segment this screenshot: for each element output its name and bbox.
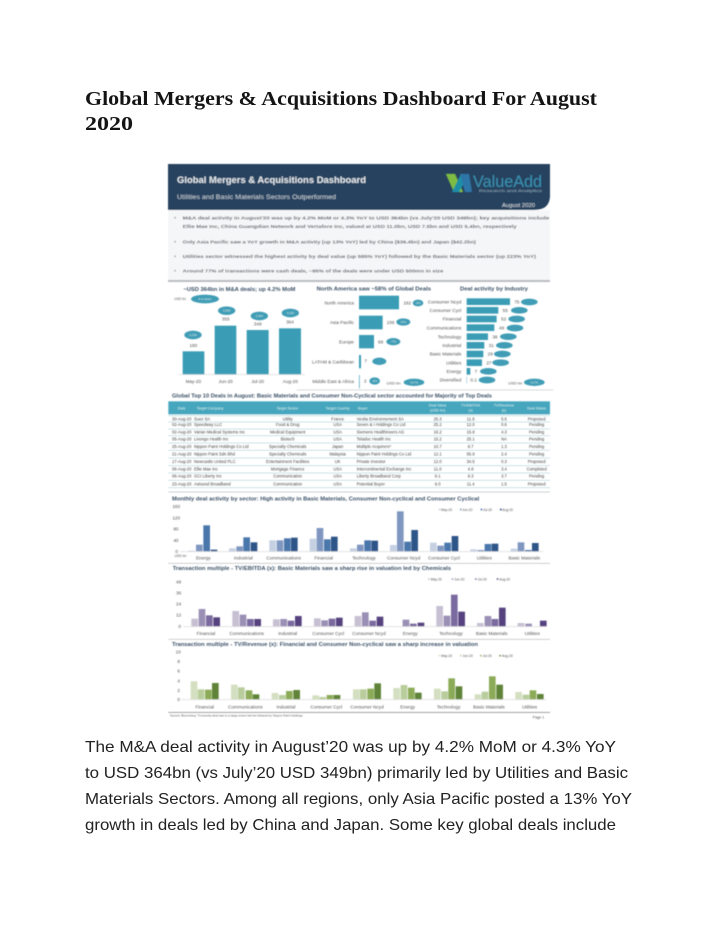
category labels: Communications [266, 556, 302, 561]
table rows: 11.9 [467, 416, 475, 421]
panel: TV/EBITDA multiple [168, 566, 550, 640]
dashboard image [168, 164, 553, 720]
panel: TV/EBITDA multiple: Transaction multiple - TV/EBITDA (x): Basic Materials saw a sharp rise in valuation led by Chemicals [173, 566, 451, 572]
table header: Date [178, 406, 186, 410]
table rows: Nippon Paint Holdings Co Ltd [194, 444, 249, 449]
table header: Target Sector [276, 406, 299, 410]
category labels: Energy [400, 704, 416, 709]
table rows: 25.2 [434, 422, 442, 427]
legend: Jul-20 [483, 654, 492, 658]
table rows: GCI Liberty Inc [194, 474, 222, 479]
table rows: 25-Aug-20 [172, 444, 192, 449]
region bar chart: USD bn [387, 381, 401, 386]
table rows: 3.7 [501, 474, 508, 479]
chart axis: 80 [173, 527, 179, 532]
category labels: Utilities [522, 704, 538, 709]
chart axis: 4 [177, 678, 180, 683]
table rows: Mortgage Finance [271, 467, 305, 472]
category labels: Consumer Cycl [312, 631, 344, 636]
table rows: UK [335, 459, 341, 464]
region bar chart: 106 [387, 320, 395, 325]
bar chart [182, 676, 547, 700]
industry bar chart: 55 [503, 308, 508, 313]
industry bar chart: 7 [475, 369, 478, 374]
category labels: Utilities [477, 556, 492, 561]
region bar chart: Europe [339, 340, 354, 345]
chart axis: 40 [173, 538, 179, 543]
table rows: Seven & I Holdings Co Ltd [357, 422, 406, 427]
bar chart: 2,964 [256, 314, 263, 318]
panel: deals by region: North America saw ~58% of Global Deals [317, 286, 431, 292]
table rows: 1.3 [501, 444, 508, 449]
dashboard header banner: Utilities and Basic Materials Sectors Outperformed [177, 194, 336, 201]
region bar chart: YoY% [410, 380, 418, 384]
table rows: Entertainment Facilities [266, 459, 309, 464]
legend: May-20 [441, 654, 452, 658]
dashboard header banner: Global Mergers & Acquisitions Dashboard [177, 175, 366, 186]
bar chart: 3,082 [223, 309, 231, 313]
table rows [168, 416, 550, 488]
table header: (x) [469, 409, 473, 413]
table header: Target Company [197, 406, 224, 410]
table rows: 05-Aug-20 [172, 436, 192, 441]
bar chart: 355 [222, 316, 230, 321]
table rows: 25.1 [467, 436, 475, 441]
table rows: 02-Aug-20 [172, 430, 192, 435]
table rows: France [331, 416, 345, 421]
table rows: Liberty Broadband Corp [357, 474, 401, 479]
industry bar chart [427, 298, 545, 386]
table rows: Specialty Chemicals [269, 451, 306, 456]
key takeaways bullets [168, 210, 550, 282]
category labels: Consumer Ncyd [387, 556, 421, 561]
industry bar chart: Consumer Cycl [429, 308, 461, 313]
table header: (x) [502, 409, 506, 413]
table rows: 15.2 [434, 436, 442, 441]
region bar chart: 182 [403, 300, 412, 305]
industry bar chart: 38 [492, 334, 498, 339]
title: 2020 [85, 113, 133, 135]
industry bar chart: 0.1 [470, 378, 477, 383]
table rows: Private Investor [357, 459, 386, 464]
industry bar chart: Industrial [442, 343, 461, 348]
table rows: Pending [529, 422, 545, 427]
category labels: Communications [229, 631, 265, 636]
region bar chart: LATAM & Caribbean [312, 359, 354, 364]
bar chart: 3,030 [287, 311, 294, 315]
table rows: 9.1 [435, 474, 441, 479]
table rows: 12.0 [467, 422, 475, 427]
page number: Page 1 [533, 716, 544, 720]
table rows: 16.2 [434, 430, 442, 435]
title: Global Mergers & Acquisitions Dashboard For August [85, 88, 597, 110]
panel: monthly deal value: USD bn [174, 297, 186, 301]
category labels [197, 631, 540, 636]
table rows: Pending [529, 474, 545, 479]
industry bar chart: Energy [447, 369, 462, 374]
table rows: Potential Buyer [357, 481, 385, 486]
table rows: Suez SA [194, 416, 210, 421]
region bar chart: Middle East & Africa [312, 379, 354, 384]
panel: deals by region: Deal activity by Industry [460, 286, 528, 292]
category labels [196, 556, 541, 561]
category labels: Communications [228, 704, 263, 709]
table rows: Intercontinental Exchange Inc [357, 467, 411, 472]
table rows: 8.0 [435, 481, 441, 486]
table rows: Malaysia [329, 451, 347, 456]
panel: deals by region [297, 286, 553, 390]
panel: top 10 deals table: Global Top 10 Deals in August: Basic Materials and Consumer Non-Cyclical sector accounted for Majority of Top Deals [172, 393, 492, 399]
table rows: 06-Aug-20 [172, 474, 192, 479]
chart axis: 0 [177, 697, 180, 702]
table header: TV/Revenue [494, 404, 514, 408]
chart axis: 8 [177, 659, 180, 664]
table rows: 06-Aug-20 [172, 467, 192, 472]
table rows: Japan [332, 444, 344, 449]
table rows: 17-Aug-20 [172, 459, 192, 464]
category labels: Energy [196, 556, 211, 561]
bar chart: 364 [286, 319, 294, 324]
chart axis: 10 [176, 649, 181, 654]
table rows: Newcastle United PLC [194, 459, 236, 464]
table header: Deal Status [527, 406, 546, 410]
chart axis: 2 [177, 688, 180, 693]
chart axis: 48 [176, 579, 182, 584]
table rows: Teladoc Health Inc [357, 436, 391, 441]
industry bar chart: Diversified [440, 378, 462, 383]
table rows: 2.4 [501, 451, 508, 456]
table rows: Varian Medical Systems Inc [194, 430, 245, 435]
table rows: 10.7 [434, 444, 442, 449]
body paragraph: growth in deals led by China and Japan. Some key global deals include [85, 817, 616, 834]
table rows: 21-Aug-20 [172, 451, 192, 456]
bar chart: 180 [189, 343, 198, 348]
table rows: 25.3 [434, 416, 442, 421]
category labels: Industrial [277, 704, 295, 709]
legend [428, 577, 510, 581]
table rows: 12.1 [434, 451, 442, 456]
table rows: Nippon Paint Holdings Co Ltd [357, 451, 412, 456]
table rows: 8.3 [468, 474, 474, 479]
panel: top 10 deals table [168, 393, 550, 492]
body paragraph [85, 739, 632, 834]
table rows: 02-Aug-20 [172, 422, 192, 427]
dashboard header banner [168, 164, 550, 210]
table rows: 4.3 [501, 430, 508, 435]
bar chart [178, 306, 305, 384]
key takeaways bullets: Around 77% of transactions were cash deals, ~95% of the deals were under USD 500mn in size [183, 268, 444, 274]
panel: TV/Revenue multiple: Transaction multiple - TV/Revenue (x): Financial and Consumer Non-cyclical saw a sharp increase in valuation [172, 642, 478, 648]
region bar chart: -7% [391, 340, 396, 344]
chart axis [172, 504, 186, 558]
table rows: Biotech [281, 436, 295, 441]
legend [439, 508, 513, 512]
category labels: Basic Materials [476, 631, 508, 636]
category labels: Industrial [234, 556, 253, 561]
category labels: Technology [439, 631, 463, 636]
bar chart: 349 [254, 321, 262, 326]
region bar chart: -6% [415, 301, 421, 305]
table rows: 23-Aug-20 [172, 481, 192, 486]
legend: Aug-20 [499, 577, 510, 581]
table rows: 15.8 [467, 430, 475, 435]
chart axis: 0 [175, 549, 178, 554]
table rows: Proposed [528, 416, 546, 421]
table rows: USA [333, 436, 342, 441]
table rows: Astound Broadband [194, 481, 231, 486]
logo: Research and Analytics [479, 188, 542, 193]
table rows: Communication [273, 474, 303, 479]
key takeaways bullets: Utilities sector witnessed the highest activity by deal value (up 585% YoY) followed by the Basic Materials sector (up 223% YoY) [183, 254, 536, 260]
industry bar chart: YoY% [530, 380, 539, 384]
chart axis: 36 [176, 591, 182, 596]
table rows: Proposed [528, 459, 546, 464]
body paragraph: to USD 364bn (vs July’20 USD 349bn) primarily led by Utilities and Basic [85, 765, 628, 782]
table rows: Speedway LLC [194, 422, 222, 427]
key takeaways bullets: Only Asia Pacific saw a YoY growth in M&A activity (up 13% YoY) led by China ($36.4bn) and Japan ($42.2bn) [183, 239, 476, 245]
panel: monthly deal value: # of deals [199, 297, 212, 301]
category labels: Consumer Cycl [428, 556, 460, 561]
table rows: Pending [529, 451, 545, 456]
table rows: Medical Equipment [270, 430, 306, 435]
table rows: Food & Drug [276, 422, 300, 427]
table rows: Communication [273, 481, 303, 486]
table rows: 4.8 [468, 467, 474, 472]
table header: (USD bn) [430, 409, 445, 413]
table rows: Siemens Healthineers AG [357, 430, 404, 435]
logo: ValueAdd [473, 172, 542, 191]
table rows: Completed [527, 467, 547, 472]
region bar chart: -8% [372, 379, 378, 383]
key takeaways bullets: M&A deal activity in August'20 was up by 4.2% MoM or 4.3% YoY to USD 364bn (vs July'20 USD 349bn); key acquisitions include [183, 215, 550, 221]
table rows: Proposed [528, 481, 546, 486]
bar chart [183, 595, 547, 627]
table rows: 55.9 [467, 451, 475, 456]
chart axis: 160 [172, 504, 181, 509]
chart axis [176, 649, 181, 702]
category labels: Consumer Cycl [310, 704, 342, 709]
body paragraph: Materials Sectors. Among all regions, only Asia Pacific posted a 13% YoY [85, 791, 632, 808]
category labels: Technology [437, 704, 461, 709]
title [85, 88, 597, 135]
legend [438, 654, 513, 658]
legend: Jun-20 [463, 654, 473, 658]
industry bar chart: Communications [427, 326, 462, 331]
table rows: USA [333, 430, 342, 435]
category labels: Financial [195, 704, 214, 709]
category labels: Energy [403, 631, 418, 636]
table rows: 12.0 [434, 459, 442, 464]
table rows: 8.7 [468, 444, 474, 449]
legend: Aug-20 [502, 654, 513, 658]
bar chart: Jul-20 [251, 379, 264, 384]
category labels: Consumer Ncyd [352, 631, 386, 636]
legend: Jul-20 [478, 577, 487, 581]
table rows: 0.6 [501, 422, 508, 427]
industry bar chart: Financial [443, 317, 461, 322]
source note: Source: Bloomberg; *Consortia deal was to a large extent bid led followed by Nippon Paint Holdings [170, 714, 303, 718]
table rows: 34.5 [467, 459, 475, 464]
table rows: USA [333, 467, 342, 472]
table rows: 3.4 [501, 467, 508, 472]
category labels: Financial [314, 556, 333, 561]
industry bar chart: 75 [514, 299, 520, 304]
category labels [195, 704, 538, 709]
legend: May-20 [431, 577, 442, 581]
panel: monthly deal activity by sector: Monthly deal activity by sector: High activity in Basic Materials, Consumer Non-cyclical and Consumer Cyclical [172, 497, 480, 503]
table rows: Pending [529, 444, 545, 449]
table rows: 5.6 [501, 416, 508, 421]
bar chart: May-20 [186, 379, 202, 384]
region bar chart: 2 [364, 379, 367, 384]
industry bar chart: 49 [499, 326, 505, 331]
industry bar chart: 31 [489, 343, 494, 348]
chart axis: 120 [172, 515, 181, 520]
legend: Jun-20 [454, 577, 465, 581]
table rows: USA [333, 474, 342, 479]
table rows: 11.4 [467, 481, 475, 486]
industry bar chart: Utilities [446, 360, 462, 365]
legend: Jun-20 [462, 508, 473, 512]
chart axis: 6 [177, 668, 180, 673]
table header: Target Country [326, 406, 350, 410]
table rows: 0.3 [501, 459, 508, 464]
region bar chart: - [379, 359, 380, 363]
region bar chart: Asia Pacific [330, 320, 355, 325]
industry bar chart: 29 [488, 352, 493, 357]
region bar chart: 7 [364, 359, 367, 364]
table rows: NA [501, 436, 507, 441]
bar chart [180, 511, 543, 552]
industry bar chart: USD bn [508, 381, 522, 386]
region bar chart [312, 296, 424, 388]
table rows: USA [333, 422, 342, 427]
table rows: USA [333, 481, 342, 486]
table rows: 30-Aug-20 [172, 416, 192, 421]
table rows: Pending [529, 430, 545, 435]
table rows: Nippon Paint Sdn Bhd [194, 451, 236, 456]
category labels: Industrial [278, 631, 297, 636]
bar chart: 2,239 [189, 333, 197, 337]
legend: Aug-20 [502, 508, 513, 512]
table rows: Ellie Mae Inc [194, 467, 218, 472]
region bar chart: 68 [378, 340, 384, 345]
category labels: Utilities [525, 631, 540, 636]
key takeaways bullets: Ellie Mae Inc, China Guangdian Network and Vertafore Inc, valued at USD 11.0bn, USD 7.5bn and USD 5.4bn, respectively [183, 224, 517, 230]
chart axis: 24 [176, 602, 182, 607]
table rows: Veolia Environnement SA [357, 416, 404, 421]
table rows: Multiple Acquirers* [357, 444, 391, 449]
category labels: Consumer Ncyd [350, 704, 384, 709]
category labels: Technology [352, 556, 376, 561]
region bar chart: North America [325, 300, 354, 305]
logo [446, 172, 542, 209]
table rows: 1.5 [501, 481, 508, 486]
table header: TV/EBITDA [461, 404, 481, 408]
industry bar chart: Consumer Ncyd [428, 299, 462, 304]
chart axis: 12 [176, 613, 182, 618]
table rows: Utility [283, 416, 294, 421]
category labels: Basic Materials [473, 704, 505, 709]
panel: TV/Revenue multiple [168, 642, 550, 720]
industry bar chart: 27 [486, 360, 492, 365]
table header: Buyer [358, 406, 368, 410]
chart axis: USD bn [175, 554, 186, 558]
bar chart: Aug-20 [283, 379, 298, 384]
table header: Deal Value [429, 404, 446, 408]
panel: monthly deal value: ~USD 364bn in M&A deals; up 4.2% MoM [183, 287, 295, 293]
panel: monthly deal value [174, 287, 305, 384]
table rows: Pending [529, 436, 545, 441]
table rows: Livongo Health Inc [194, 436, 228, 441]
category labels: Financial [197, 631, 215, 636]
chart axis: 0 [178, 624, 181, 629]
legend: May-20 [441, 508, 452, 512]
legend: Jul-20 [483, 508, 492, 512]
industry bar chart: Basic Materials [430, 352, 462, 357]
region bar chart: 13% [400, 320, 407, 324]
logo: August 2020 [502, 203, 535, 209]
panel: monthly deal activity by sector [168, 497, 550, 564]
category labels: Basic Materials [509, 556, 541, 561]
chart axis [176, 579, 182, 629]
bar chart: Jun-20 [219, 379, 233, 384]
table rows: Specialty Chemicals [269, 444, 306, 449]
industry bar chart: Technology [438, 334, 462, 339]
table rows: 11.0 [434, 467, 442, 472]
industry bar chart: 52 [501, 317, 507, 322]
table header [168, 401, 550, 414]
body paragraph: The M&A deal activity in August’20 was up by 4.2% MoM or 4.3% YoY [85, 739, 616, 756]
